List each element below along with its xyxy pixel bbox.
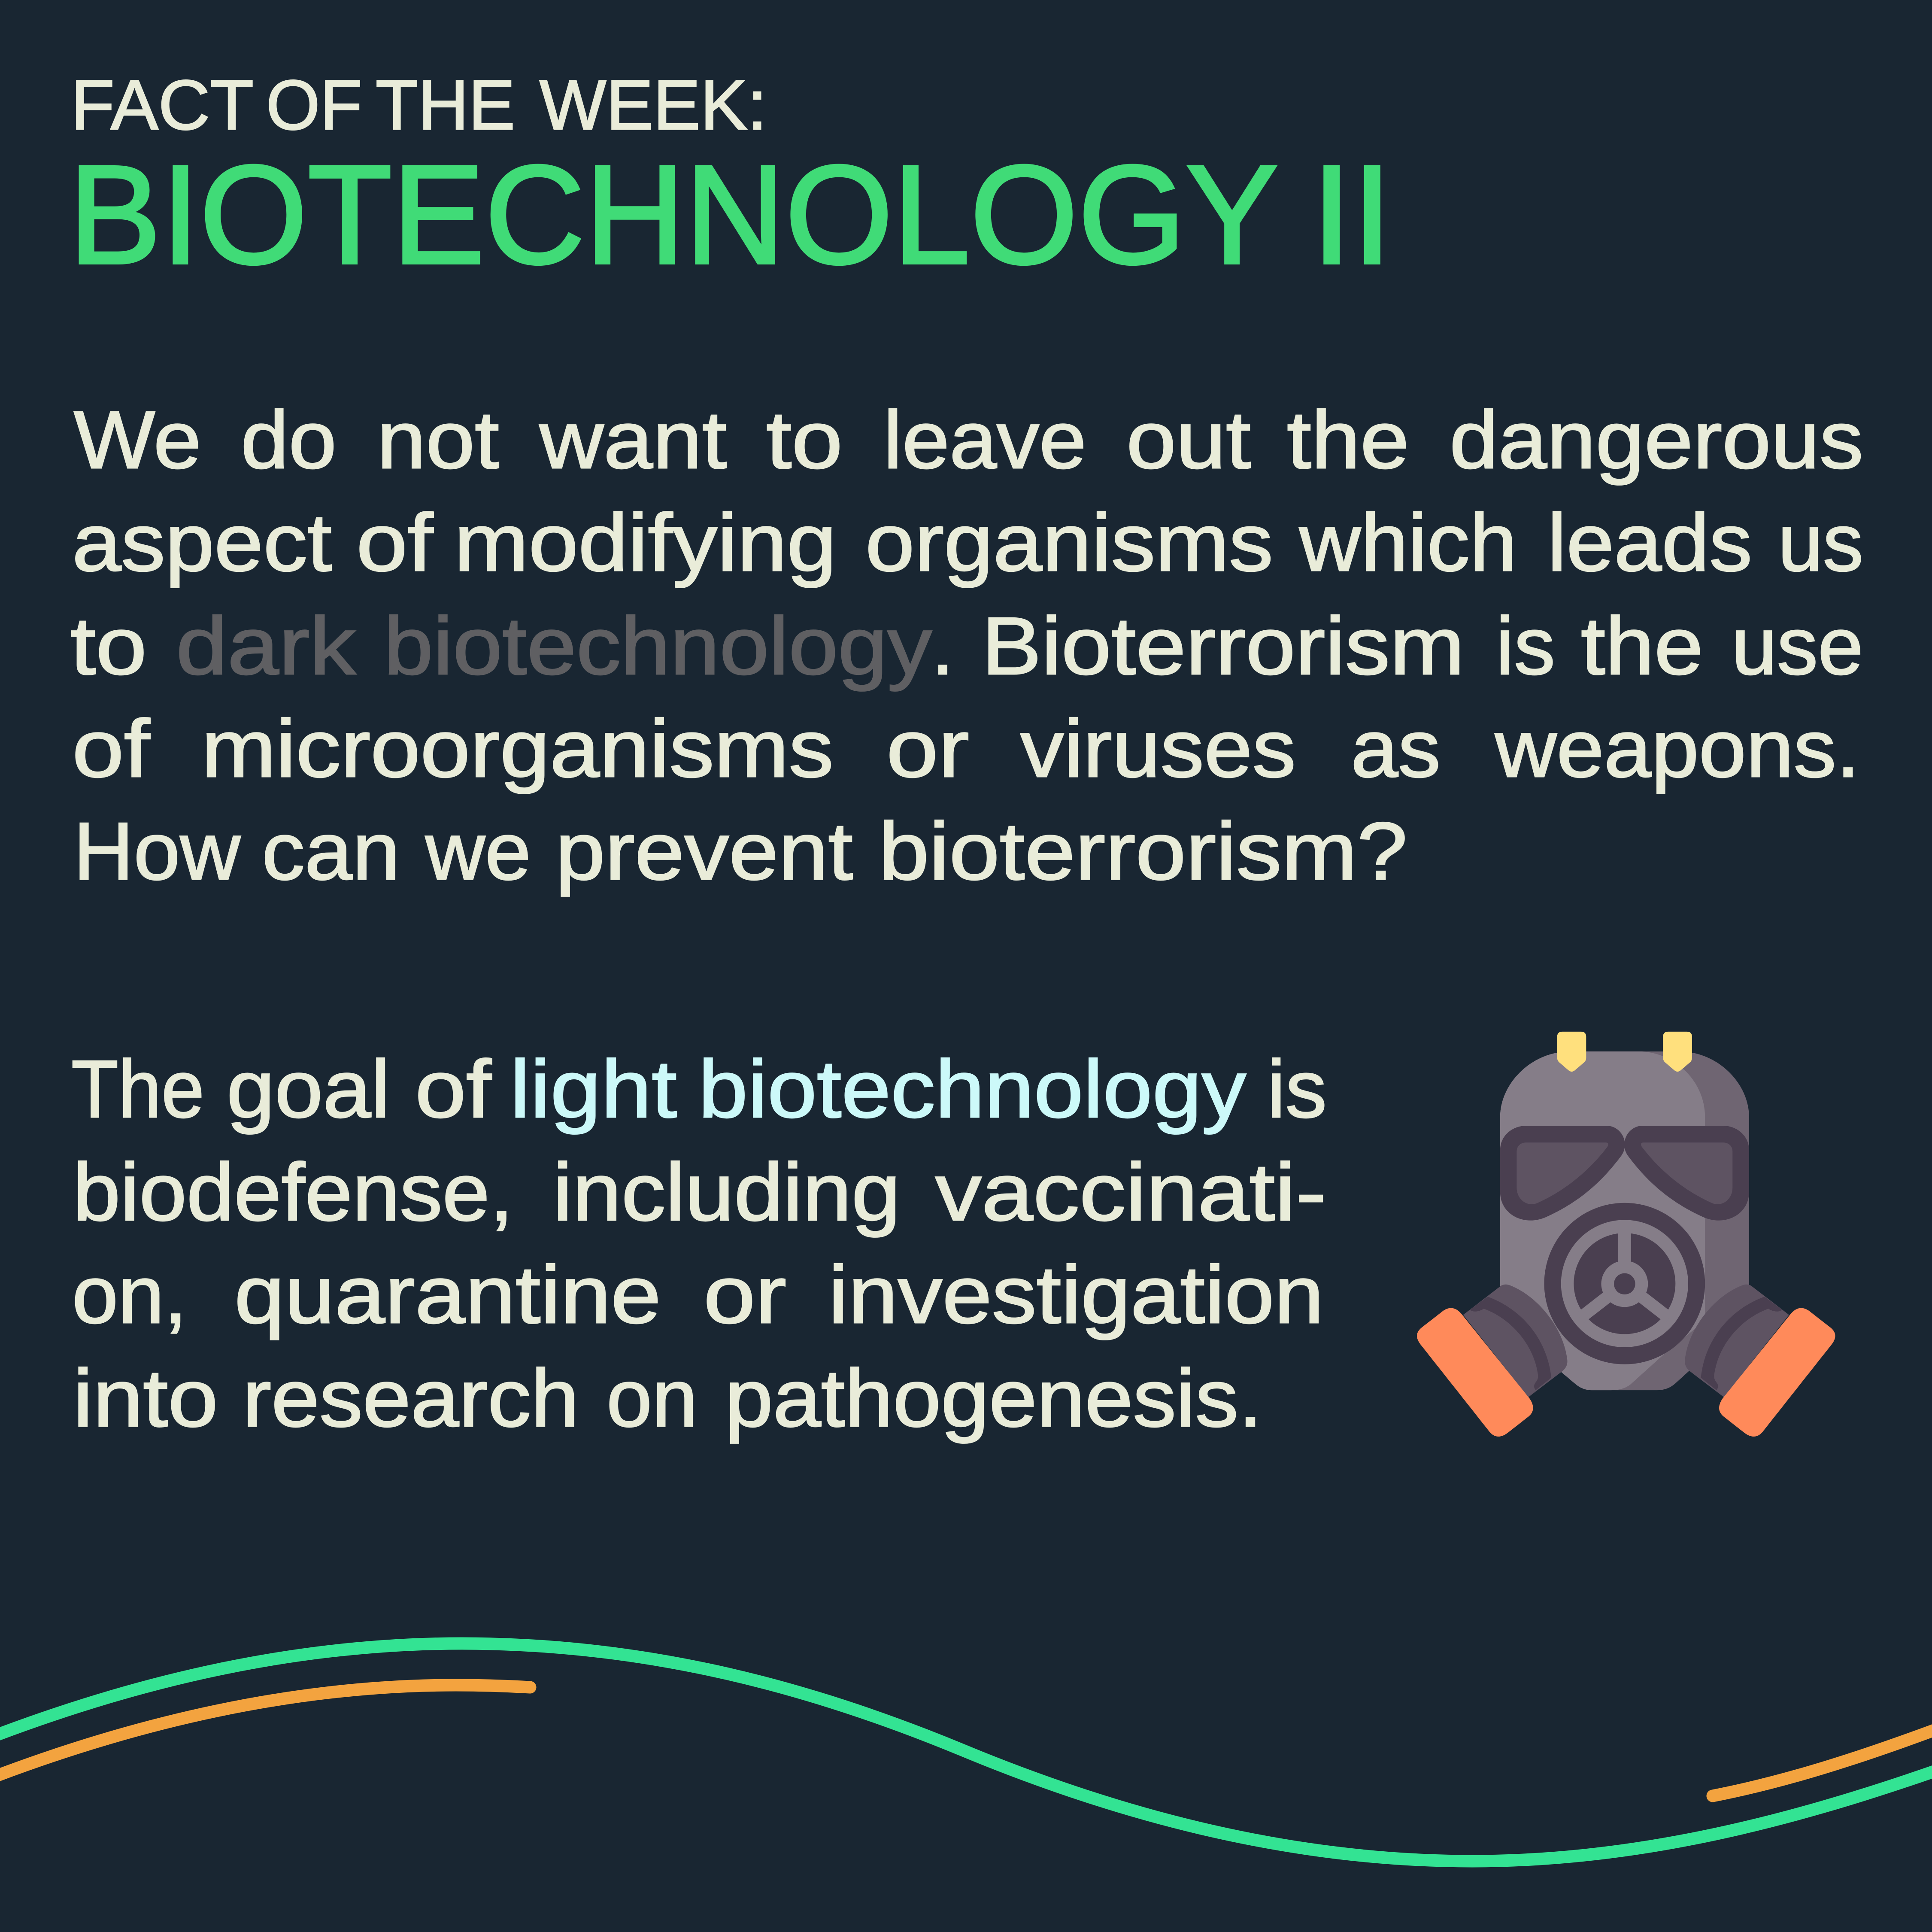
text block: dark biotechnology paragraph: can [262, 806, 400, 897]
text block: dark biotechnology paragraph: not [377, 395, 499, 486]
text block: light biotechnology paragraph: biodefense, [73, 1147, 513, 1238]
highlighted term: dark biotechnology: dark [176, 601, 356, 692]
left yellow clip [1557, 1032, 1586, 1072]
title: biotechnology II: II [1311, 137, 1392, 293]
text block: dark biotechnology paragraph: weapons. [1495, 703, 1860, 794]
right filter connector [1685, 1285, 1789, 1397]
text block: dark biotechnology paragraph: which [1299, 497, 1517, 588]
text block: light biotechnology paragraph: pathogenesis. [725, 1353, 1262, 1444]
text block: dark biotechnology paragraph: Bioterrorism [982, 601, 1465, 692]
decorative wave: orange left [0, 1685, 530, 1776]
respirator valve [1544, 1203, 1705, 1364]
text block: dark biotechnology paragraph: We [74, 395, 201, 486]
text block: dark biotechnology paragraph: we [425, 806, 531, 897]
highlighted term: dark biotechnology: biotechnology [384, 601, 932, 692]
highlighted term: dark biotechnology [176, 601, 932, 692]
icon: gas mask [1417, 1032, 1835, 1437]
text block: dark biotechnology paragraph: the [1287, 395, 1409, 486]
text block: light biotechnology paragraph: research [243, 1353, 579, 1444]
text block: dark biotechnology paragraph: us [1778, 497, 1863, 588]
text block: dark biotechnology paragraph: or [886, 703, 969, 794]
mask body light face [1500, 1051, 1705, 1390]
text block: dark biotechnology paragraph: to [70, 601, 147, 692]
text block: dark biotechnology paragraph: prevent [555, 806, 853, 897]
left filter connector [1463, 1285, 1567, 1397]
text block: light biotechnology paragraph [71, 1044, 1327, 1444]
text block: light biotechnology paragraph: on [607, 1353, 698, 1444]
text block: dark biotechnology paragraph: microorganisms [201, 703, 834, 794]
right orange filter [1719, 1308, 1835, 1437]
heading: fact of the week: WEEK: [540, 66, 767, 144]
text block: light biotechnology paragraph: including [553, 1147, 901, 1238]
text block: dark biotechnology paragraph: organisms [865, 497, 1273, 588]
text block: dark biotechnology paragraph: to [766, 395, 843, 486]
heading: fact of the week: THE [376, 66, 515, 144]
heading: fact of the week [71, 66, 767, 144]
text block: light biotechnology paragraph: The [71, 1044, 204, 1135]
heading: fact of the week: FACT [71, 66, 254, 144]
text block: dark biotechnology paragraph: as [1351, 703, 1441, 794]
mask body shadow side [1500, 1051, 1749, 1390]
text block: dark biotechnology paragraph: of [72, 703, 150, 794]
text block: light biotechnology paragraph: goal [227, 1044, 390, 1135]
text block: light biotechnology paragraph: of [415, 1044, 492, 1135]
text block: dark biotechnology paragraph: viruses [1020, 703, 1296, 794]
heading: fact of the week: OF [266, 66, 362, 144]
right goggle lens [1624, 1126, 1749, 1221]
left connector strap [1470, 1297, 1551, 1390]
text block: dark biotechnology paragraph: use [1732, 601, 1863, 692]
text block: light biotechnology paragraph: quarantine [234, 1249, 661, 1340]
text block: light biotechnology paragraph: vaccinati- [935, 1147, 1326, 1238]
left goggle lens [1500, 1126, 1625, 1221]
text block: light biotechnology paragraph: or [704, 1249, 786, 1340]
decorative wave: orange right [1713, 1729, 1932, 1796]
text block: dark biotechnology paragraph: leave [883, 395, 1086, 486]
text block: dark biotechnology paragraph: do [241, 395, 337, 486]
text block: dark biotechnology paragraph: out [1126, 395, 1251, 486]
text block: dark biotechnology paragraph: modifying [454, 497, 837, 588]
text block: dark biotechnology paragraph: How [73, 806, 241, 897]
text block: light biotechnology paragraph: investigation [828, 1249, 1324, 1340]
text block: light biotechnology paragraph: into [73, 1353, 218, 1444]
text block: light biotechnology paragraph: on, [72, 1249, 187, 1340]
text block: light biotechnology paragraph: is [1267, 1044, 1327, 1135]
text block: dark biotechnology paragraph [70, 395, 1863, 897]
text block: dark biotechnology paragraph: want [539, 395, 727, 486]
highlighted term: light biotechnology: light [510, 1044, 677, 1135]
text block: dark biotechnology paragraph: bioterrorism? [879, 806, 1407, 897]
text block: dark biotechnology paragraph: of [356, 497, 434, 588]
highlighted term: light biotechnology [510, 1044, 1246, 1135]
text block: dark biotechnology paragraph: . [931, 601, 954, 692]
text block: dark biotechnology paragraph: dangerous [1450, 395, 1863, 486]
decorative wave: green [0, 1643, 1932, 1861]
title: biotechnology II: BIOTECHNOLOGY [69, 137, 1278, 293]
text block: dark biotechnology paragraph: is [1496, 601, 1555, 692]
text block: dark biotechnology paragraph: the [1581, 601, 1703, 692]
right yellow clip [1663, 1032, 1692, 1072]
text block: dark biotechnology paragraph: aspect [72, 497, 332, 588]
right connector strap [1701, 1297, 1782, 1390]
left orange filter [1417, 1308, 1533, 1437]
text block: dark biotechnology paragraph: leads [1547, 497, 1752, 588]
highlighted term: light biotechnology: biotechnology [698, 1044, 1246, 1135]
